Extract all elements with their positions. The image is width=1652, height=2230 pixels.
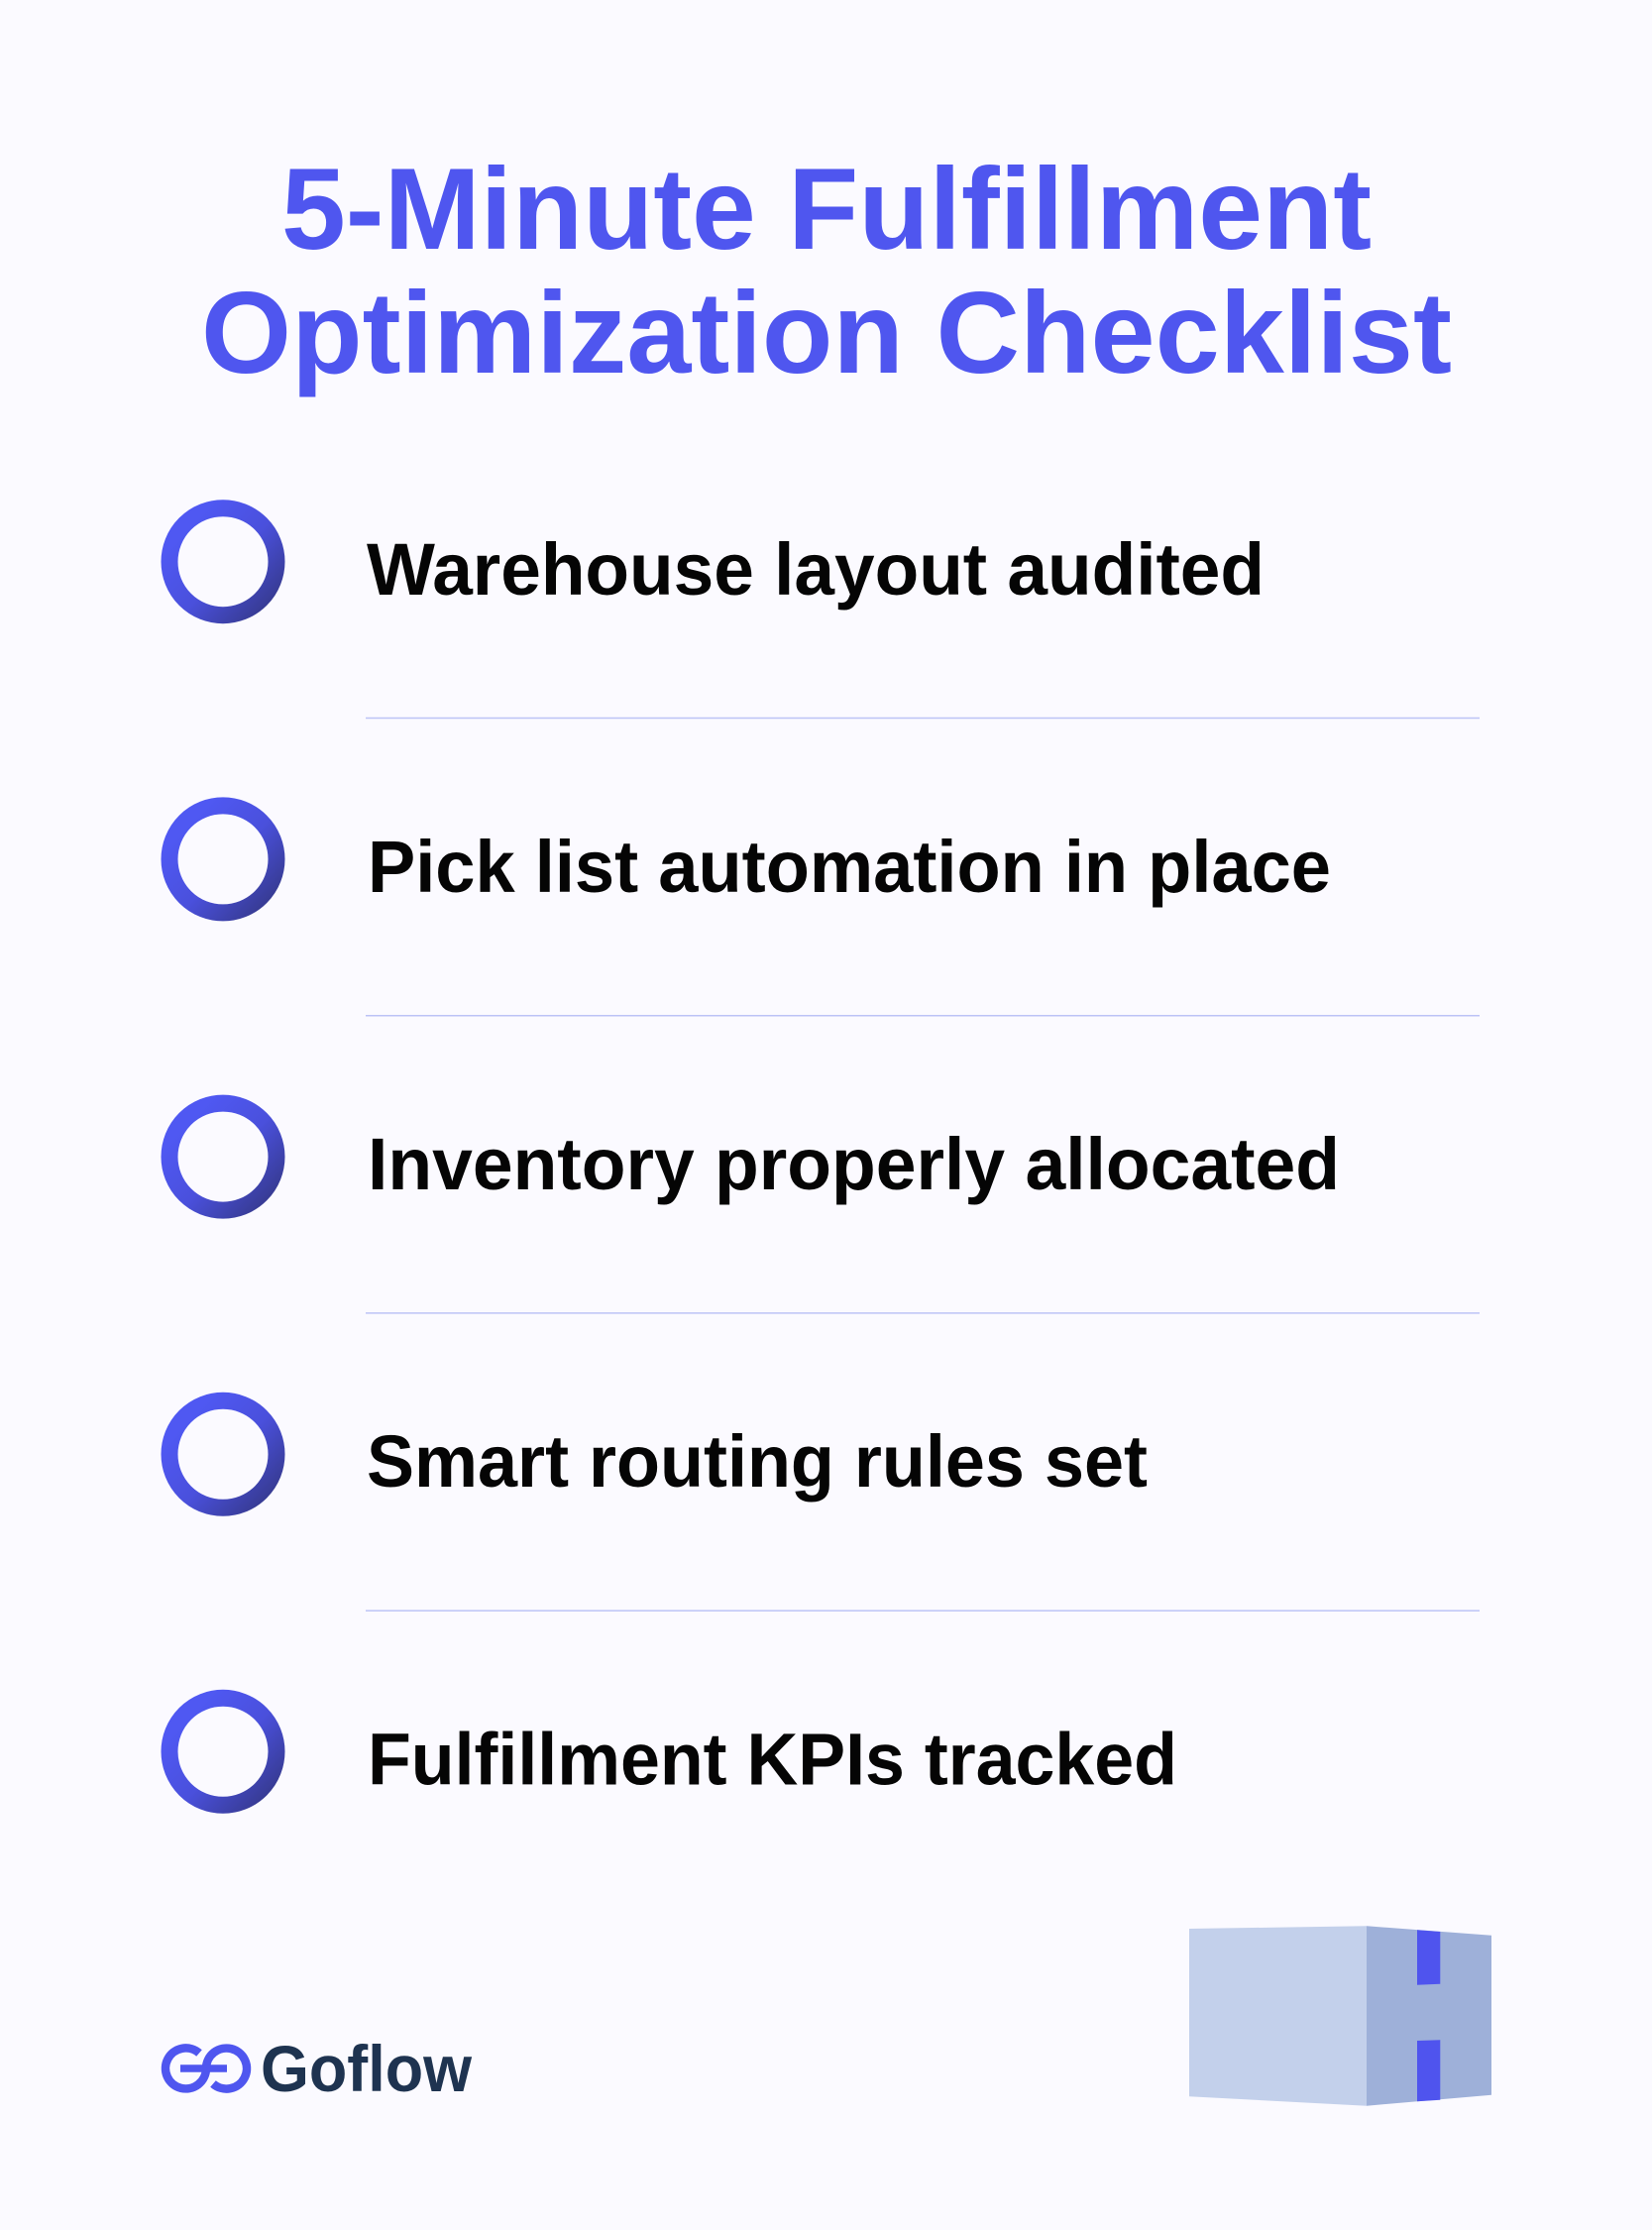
title: Optimization Checklist [201, 268, 1452, 397]
item text: Fulfillment KPIs tracked [368, 1719, 1177, 1800]
icon: cardboard box [1189, 1926, 1491, 2106]
icon: empty checkbox circle [169, 1400, 276, 1507]
logo wordmark: Goflow [261, 2032, 473, 2105]
icon: empty checkbox circle [169, 508, 276, 615]
icon: empty checkbox circle [169, 1698, 276, 1805]
icon: empty checkbox circle [169, 806, 276, 913]
checklist item: smart routing [169, 1400, 1148, 1507]
checklist item: pick list automation [169, 806, 1331, 913]
checklist item: inventory allocation [169, 1103, 1340, 1210]
item text: Warehouse layout audited [367, 528, 1265, 611]
checklist item: warehouse layout [169, 508, 1265, 615]
item text: Inventory properly allocated [368, 1123, 1340, 1205]
item text: Pick list automation in place [368, 826, 1331, 908]
Goflow logo [165, 2032, 473, 2105]
checklist item: fulfillment KPIs [169, 1698, 1177, 1805]
title [201, 144, 1452, 397]
title: 5-Minute Fulfillment [281, 144, 1372, 274]
icon: empty checkbox circle [169, 1103, 276, 1210]
checklist [169, 508, 1480, 1805]
icon: logo mark [165, 2048, 247, 2089]
item text: Smart routing rules set [367, 1420, 1148, 1503]
